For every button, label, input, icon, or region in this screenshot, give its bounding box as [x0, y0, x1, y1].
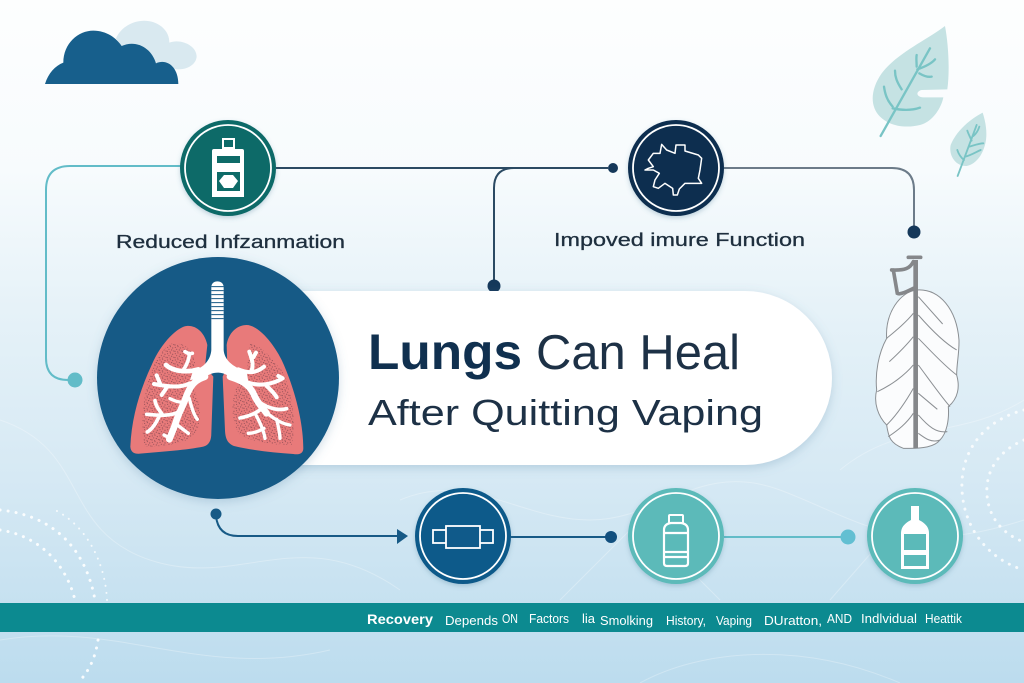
connector: bottom dark dot line [510, 531, 617, 543]
band text: ON [502, 612, 518, 626]
band text: Factors [529, 612, 569, 626]
band text: Recovery [367, 611, 433, 627]
panel: title pill: Can Heal [536, 326, 740, 380]
icon: large leaf [873, 26, 949, 136]
band text: Smolking [600, 614, 653, 628]
icon: small leaf [950, 113, 986, 176]
icon: lungs circle [97, 257, 339, 499]
panel: bottom band [0, 603, 1024, 632]
band text: Indlvidual [861, 612, 917, 626]
icon: teal tall bottle circle [867, 488, 963, 584]
panel: title pill [218, 291, 832, 465]
band text: lia [582, 612, 595, 626]
icon: teal bottle circle [628, 488, 724, 584]
band text [367, 611, 963, 628]
band text: Heattik [925, 612, 963, 626]
connector: bottom arrow [210, 508, 408, 544]
label: reduced inflammation: Reduced Infzanmation [116, 232, 345, 252]
band text: AND [827, 612, 852, 626]
band text: Vaping [716, 614, 752, 628]
label: improved immune function: Impoved imure Function [554, 230, 805, 250]
connector: bottom teal dot line [724, 530, 856, 544]
connector: left teal line [46, 166, 182, 388]
connector: top dark line [276, 163, 618, 292]
icon: filter circle [415, 488, 511, 584]
icon: clouds [45, 21, 197, 84]
title: lungs can heal: Lungs [368, 324, 522, 380]
band text: History, [666, 614, 706, 628]
band text: Depends [445, 614, 498, 628]
icon: immune cell circle [628, 120, 724, 216]
icon: healthy lung leaf [876, 257, 959, 448]
panel: title pill: After Quitting Vaping [368, 392, 763, 433]
connector: top right line [724, 168, 920, 238]
band text: DUratton, [764, 614, 822, 628]
icon: medicine bottle circle [180, 120, 276, 216]
